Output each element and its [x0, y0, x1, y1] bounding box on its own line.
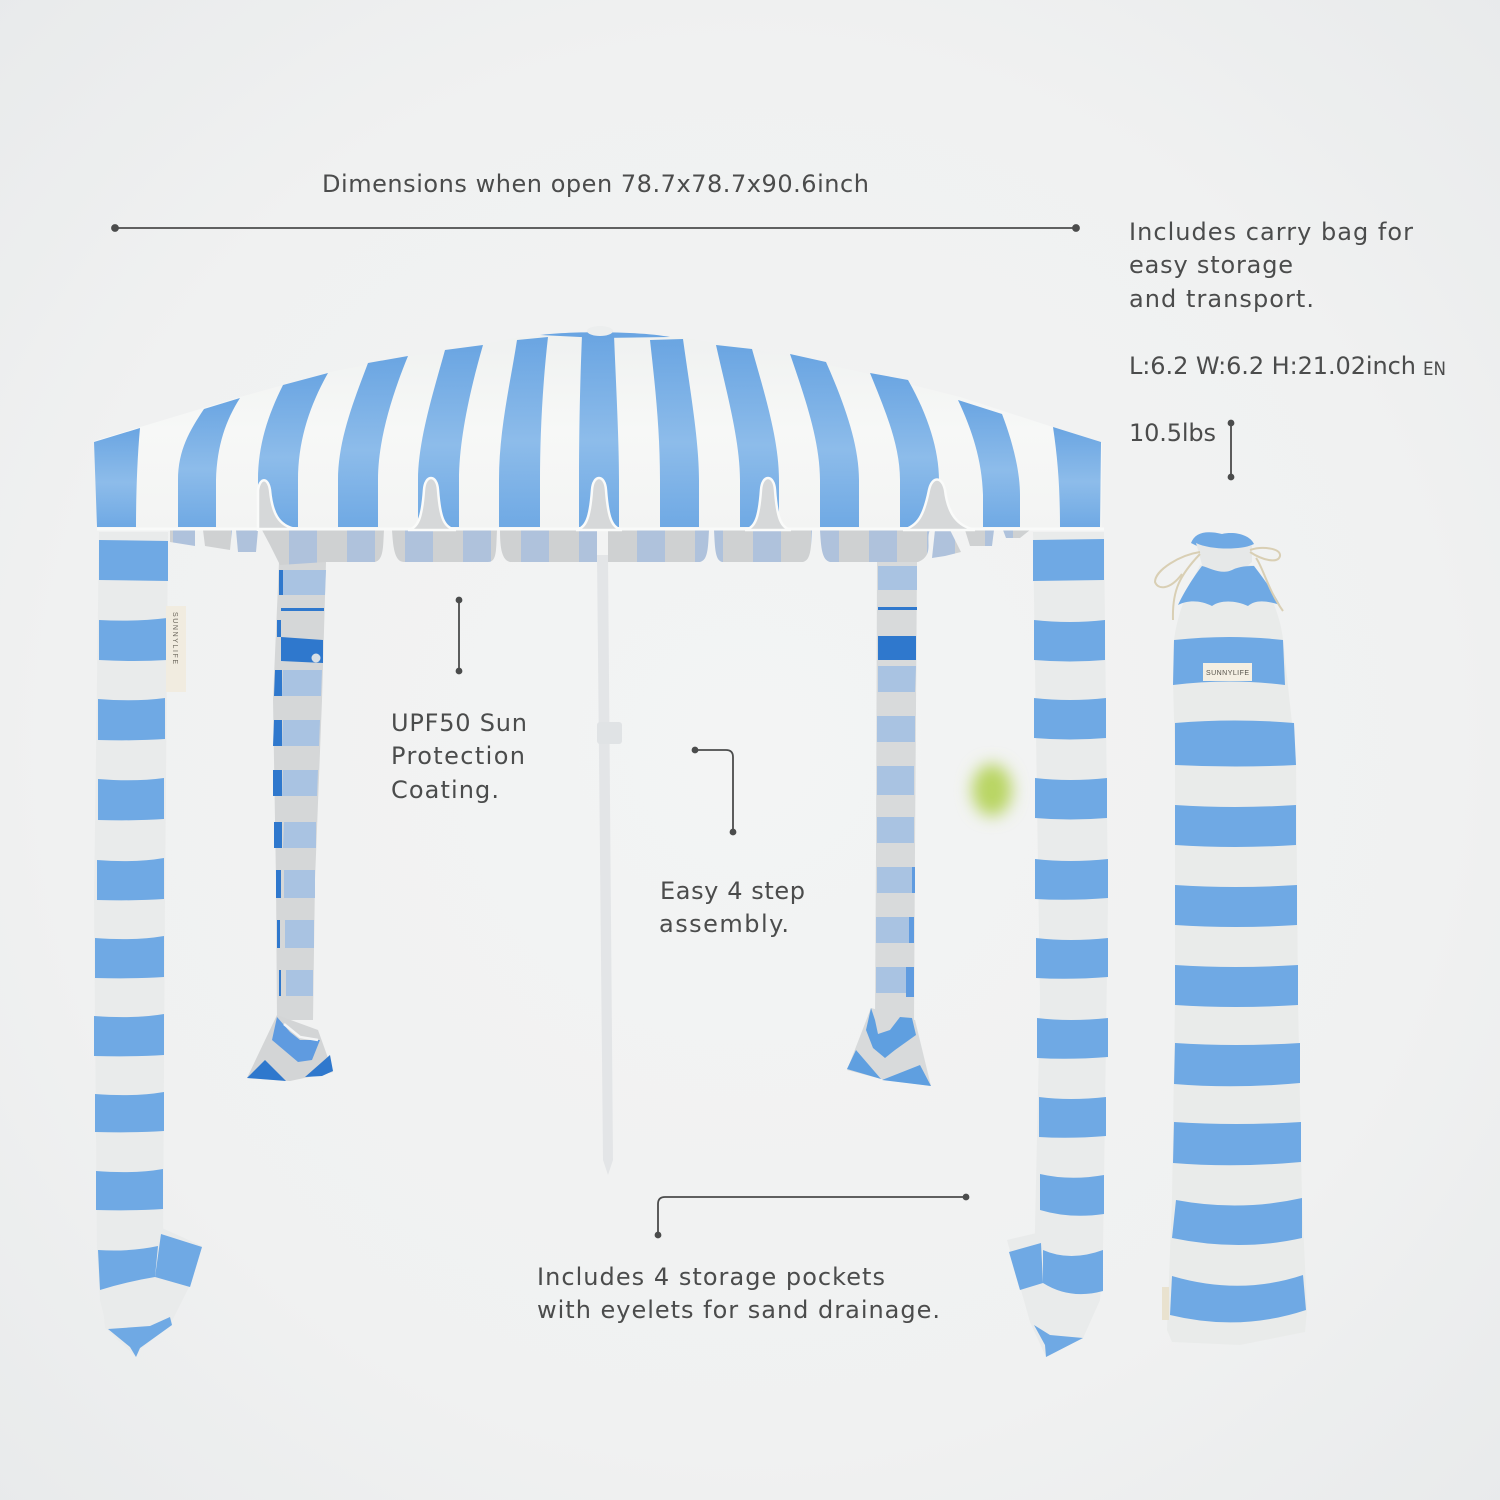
- pockets leader line: [656, 1194, 968, 1238]
- green blur spot: [972, 764, 1012, 816]
- drawstring: [1155, 548, 1283, 620]
- bag label: SUNNYLIFE: [1206, 670, 1249, 677]
- back left leg: [247, 562, 333, 1081]
- text block: pockets: with eyelets for sand drainage.: [537, 1296, 940, 1324]
- text block: pockets: [537, 1263, 940, 1324]
- heading: open dimensions: Dimensions when open 78.7x78.7x90.6inch: [322, 170, 869, 198]
- text: bag dimensions: L:6.2 W:6.2 H:21.02inch: [1129, 352, 1416, 380]
- text: bag dimensions: EN: [1423, 358, 1446, 380]
- side tag: bag: [1162, 1287, 1169, 1320]
- text block: assembly: [659, 877, 805, 938]
- centre pole: [597, 555, 622, 1175]
- text: weight: 10.5lbs: [1129, 419, 1216, 447]
- back left foot pocket: [247, 1015, 333, 1081]
- front left leg: [94, 532, 202, 1357]
- text block: assembly: assembly.: [659, 910, 789, 938]
- front right foot pocket: [1007, 1232, 1103, 1357]
- weight leader line: [1228, 420, 1234, 480]
- text block: carry bag: Includes carry bag for: [1129, 218, 1413, 246]
- sewn label: left leg: [166, 606, 186, 692]
- canopy skirt: [170, 530, 1030, 565]
- text block: UPF50: Protection: [391, 742, 525, 770]
- text block: carry bag: [1129, 218, 1413, 313]
- text block: UPF50: UPF50 Sun: [391, 709, 527, 737]
- text block: UPF50: Coating.: [391, 776, 499, 804]
- carry bag: [1155, 532, 1307, 1345]
- width dimension line: [112, 225, 1079, 231]
- text block: pockets: Includes 4 storage pockets: [537, 1263, 885, 1291]
- back right foot pocket: [847, 1008, 931, 1086]
- front right leg: [1007, 532, 1108, 1357]
- text block: UPF50: [391, 709, 527, 804]
- assembly leader line: [692, 748, 736, 834]
- text block: carry bag: easy storage: [1129, 251, 1293, 279]
- text block: carry bag: and transport.: [1129, 285, 1314, 313]
- front left foot pocket: [97, 1228, 202, 1357]
- sewn label: left leg: SUNNYLIFE: [171, 612, 178, 666]
- text block: assembly: Easy 4 step: [660, 877, 805, 905]
- bag label: [1203, 663, 1252, 681]
- UPF leader line: [456, 598, 462, 674]
- back right leg: [847, 562, 931, 1086]
- canopy roof: [94, 326, 1104, 531]
- canopy scallop notches: [258, 478, 975, 531]
